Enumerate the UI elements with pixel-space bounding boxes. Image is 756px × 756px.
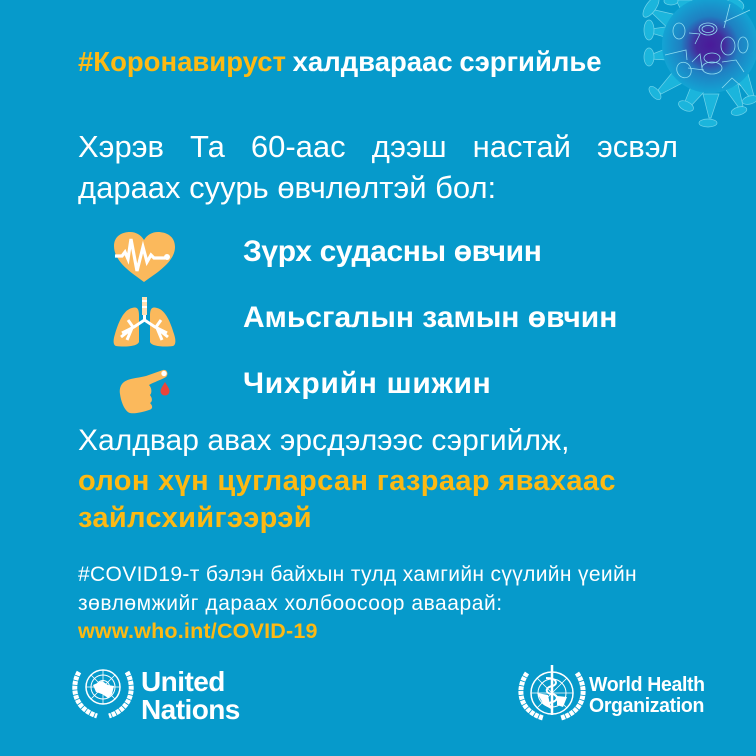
icon: coronavirus illustration <box>642 0 756 128</box>
footer text: зөвлөмжийг дараах холбоосоор аваарай: <box>78 592 503 615</box>
highlighted advice: зайлсхийгээрэй <box>78 502 312 534</box>
heading: heart disease: Зүрх судасны өвчин <box>243 235 541 268</box>
heading: diabetes: Чихрийн шижин <box>243 367 492 400</box>
intro text: дараах суурь өвчлөлтэй бол: <box>78 170 496 205</box>
icon: finger with blood drop <box>120 370 170 414</box>
footer text <box>78 563 637 615</box>
icon: lungs <box>114 297 176 346</box>
logo: United Nations emblem <box>72 669 134 718</box>
highlighted advice <box>78 465 616 534</box>
logo: WHO wordmark: Organization <box>589 694 704 717</box>
advice text: Халдвар авах эрсдэлээс сэргийлж, <box>78 424 570 457</box>
heading: respiratory disease: Амьсгалын замын өвчин <box>243 301 617 334</box>
logo: WHO wordmark: World Health <box>589 673 705 696</box>
title: #Коронавируст халдвараас сэргийлье <box>78 46 602 77</box>
logo: United Nations wordmark: Nations <box>141 694 240 725</box>
intro text: Хэрэв Та 60-аас дээш настай эсвэл <box>78 129 678 164</box>
intro text <box>78 129 678 205</box>
logo: United Nations wordmark: United <box>141 666 225 697</box>
logo: WHO wordmark <box>589 673 705 717</box>
footer text: #COVID19-т бэлэн байхын тулд хамгийн сүүлийн үеийн <box>78 563 637 586</box>
logo: WHO emblem <box>518 665 586 720</box>
logo: United Nations wordmark <box>141 666 240 725</box>
icon: heart with pulse <box>114 232 175 282</box>
link: www.who.int/COVID-19 <box>78 619 318 643</box>
highlighted advice: олон хүн цугларсан газраар явахаас <box>78 465 616 497</box>
